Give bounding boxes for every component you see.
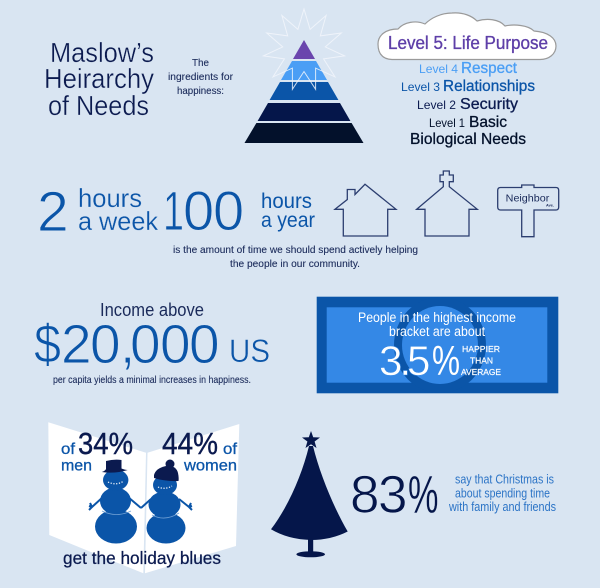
christmas text [448,472,556,514]
stat: 100 hours a year: hours [261,190,312,213]
stat: 34% of men: 34% [78,426,133,461]
income heading: Income above [100,299,204,320]
stat: 34% of men: men [61,458,92,475]
icon: snowman with beanie [141,460,192,544]
stat: 100 hours a year [163,179,315,242]
stat: 83%: 83 [350,466,407,525]
title: Heirarchy [44,63,154,94]
christmas text: about spending time [455,486,550,500]
panel: banknote: bracket are about [389,324,485,339]
stat: 100 hours a year: a year [261,209,315,232]
community text: is the amount of time we should spend actively helping [173,244,418,256]
level 4: Respect [461,60,518,77]
stat: 2 hours a week: a week [78,206,159,236]
icon: christmas tree [271,431,348,557]
level 1: Level 1 [429,116,465,130]
income figure: 20,000 [61,313,220,375]
intro text: happiness: [177,85,224,97]
cloud: level 5: Level 5: Life Purpose [388,33,548,53]
level 4: Level 4 [419,62,458,76]
title: Maslow’s [50,37,154,68]
stat: 34% of men [61,426,133,475]
level 3: Relationships [443,78,535,95]
icon: house [335,184,396,236]
panel: banknote [317,297,558,393]
icon: church [417,171,477,236]
stat: 34% of men: of [61,441,76,458]
panel: open book with snowmen [48,422,239,573]
income figure [34,313,270,375]
intro text [168,57,233,97]
stat: 44% of women: women [183,458,237,475]
income figure: US [229,333,270,369]
stat: 83% [350,466,438,525]
level 3: Level 3 [401,80,440,94]
icon: neighbor sign: Neighbor [506,193,550,205]
stat: 44% of women: of [223,441,238,458]
panel: banknote: People in the highest income [358,310,516,325]
level 1 [410,114,526,148]
level 1: Biological Needs [410,131,526,148]
title: of Needs [48,90,149,121]
panel: banknote: 3.5 [379,337,430,384]
cloud: level 5 [378,13,556,60]
icon: snowman with hat [89,460,141,544]
stat: 83%: % [408,466,438,525]
stat: 2 hours a week: hours [78,183,142,213]
panel: banknote: AVERAGE [461,367,501,377]
stat: 2 hours a week [37,180,159,244]
christmas text: say that Christmas is [455,472,554,486]
level 2: Security [460,96,518,113]
intro text: ingredients for [168,71,233,83]
christmas text: with family and friends [448,500,556,514]
pyramid with star [244,9,364,143]
intro text: The [192,57,209,69]
community text [173,244,418,270]
community text: the people in our community. [230,258,360,270]
panel: banknote: % [432,337,460,384]
stat: 100 hours a year: 1 [163,179,184,242]
icon: neighbor sign [498,185,559,237]
caption: holiday blues: get the holiday blues [63,548,221,568]
title [44,37,154,121]
level 2: Level 2 [417,98,456,112]
stat: 2 hours a week: 2 [37,180,69,244]
income note: per capita yields a minimal increases in happiness. [53,374,251,386]
panel: banknote: HAPPIER [462,344,500,354]
stat: 100 hours a year: 00 [183,179,244,242]
income figure: $ [34,313,61,375]
level 1: Basic [469,114,507,131]
stat: 44% of women: 44% [162,426,218,461]
icon: neighbor sign: Ave. [546,202,554,208]
stat: 44% of women [162,426,238,475]
panel: banknote: THAN [470,356,493,366]
